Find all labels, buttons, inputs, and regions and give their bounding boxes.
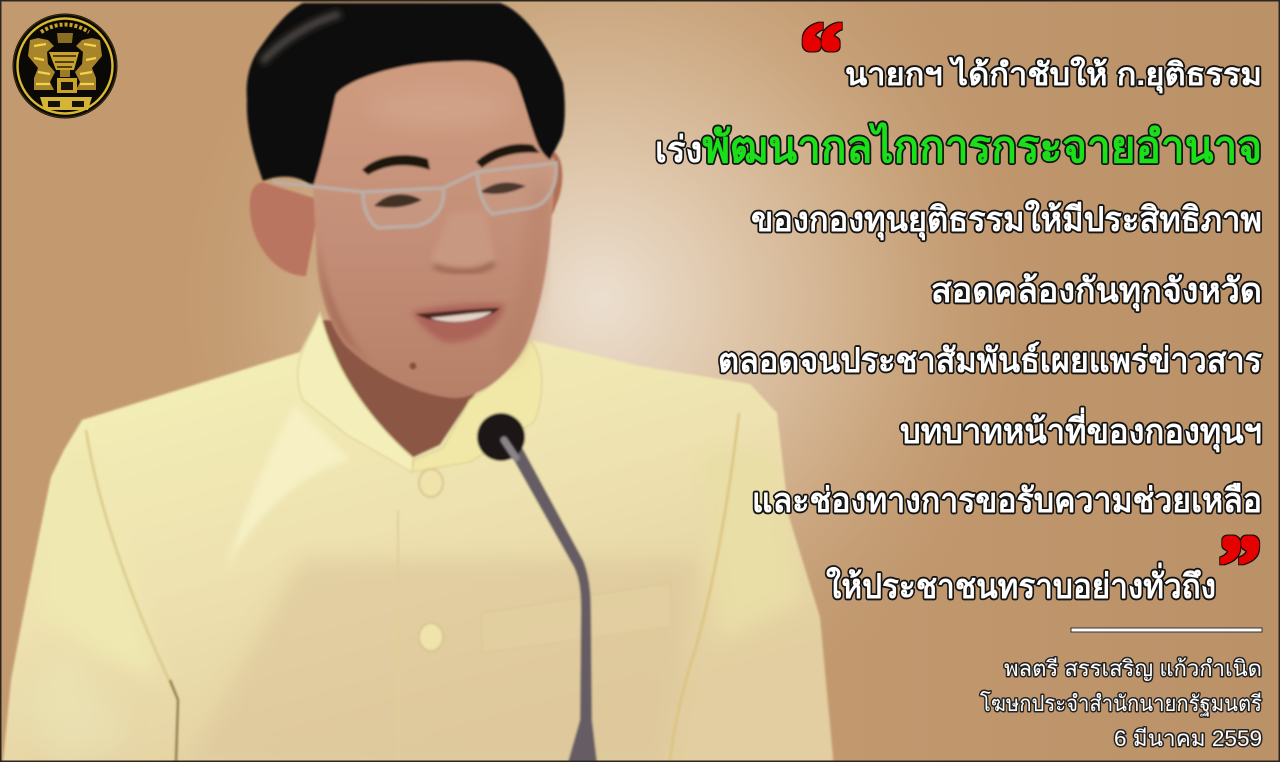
speaker title: โฆษกประจำสำนักนายกรัฐมนตรี bbox=[980, 691, 1262, 717]
opening quotation mark: “ bbox=[800, 4, 843, 100]
emblem: ornate crest arc bbox=[41, 24, 89, 32]
ears bbox=[250, 182, 320, 276]
emblem: right lion bbox=[75, 38, 102, 90]
eyes bbox=[374, 194, 422, 208]
collar right bbox=[412, 340, 542, 472]
line 1: นายกฯ ได้กำชับให้ ก.ยุติธรรม bbox=[845, 56, 1262, 94]
hair highlight bbox=[262, 14, 340, 62]
emblem: central vessel bbox=[49, 33, 79, 93]
jacket buttons bbox=[419, 469, 443, 651]
eyebrows bbox=[362, 155, 430, 175]
mole bbox=[410, 362, 416, 370]
line 4: สอดคล้องกันทุกจังหวัด bbox=[931, 272, 1262, 312]
jacket folds and highlights bbox=[20, 405, 800, 762]
emblem: base bbox=[40, 97, 92, 110]
closing quotation mark: ” bbox=[1218, 517, 1262, 613]
quote text block bbox=[655, 4, 1263, 613]
emblem: left lion bbox=[28, 38, 55, 90]
line 6: บทบาทหน้าที่ของกองทุนฯ bbox=[900, 407, 1262, 453]
collar left bbox=[298, 313, 413, 472]
photo: spokesperson at microphone bbox=[3, 3, 833, 762]
microphone bbox=[477, 413, 597, 762]
divider rule bbox=[1071, 628, 1262, 632]
line 3: ของกองทุนยุติธรรมให้มีประสิทธิภาพ bbox=[751, 199, 1262, 241]
glasses bbox=[273, 163, 556, 228]
date: 6 มีนาคม 2559 bbox=[1114, 726, 1262, 751]
line 7: และช่องทางการขอรับความช่วยเหลือ bbox=[752, 482, 1262, 520]
jacket bbox=[3, 313, 833, 762]
line 5: ตลอดจนประชาสัมพันธ์เผยแพร่ข่าวสาร bbox=[718, 341, 1263, 380]
mouth bbox=[412, 303, 505, 342]
face shading bbox=[316, 88, 540, 372]
attribution bbox=[980, 656, 1262, 751]
line 8: ให้ประชาชนทราบอย่างทั่วถึง bbox=[826, 562, 1216, 606]
icon: government seal emblem bbox=[12, 14, 118, 118]
neck bbox=[320, 320, 530, 458]
line 2 highlighted: เร่งพัฒนากลไกการกระจายอำนาจ bbox=[655, 121, 1262, 172]
nose bbox=[432, 210, 494, 269]
hair bbox=[247, 3, 565, 187]
speaker name: พลตรี สรรเสริญ แก้วกำเนิด bbox=[1004, 656, 1262, 681]
jacket pocket bbox=[482, 583, 672, 653]
face bbox=[313, 61, 555, 398]
